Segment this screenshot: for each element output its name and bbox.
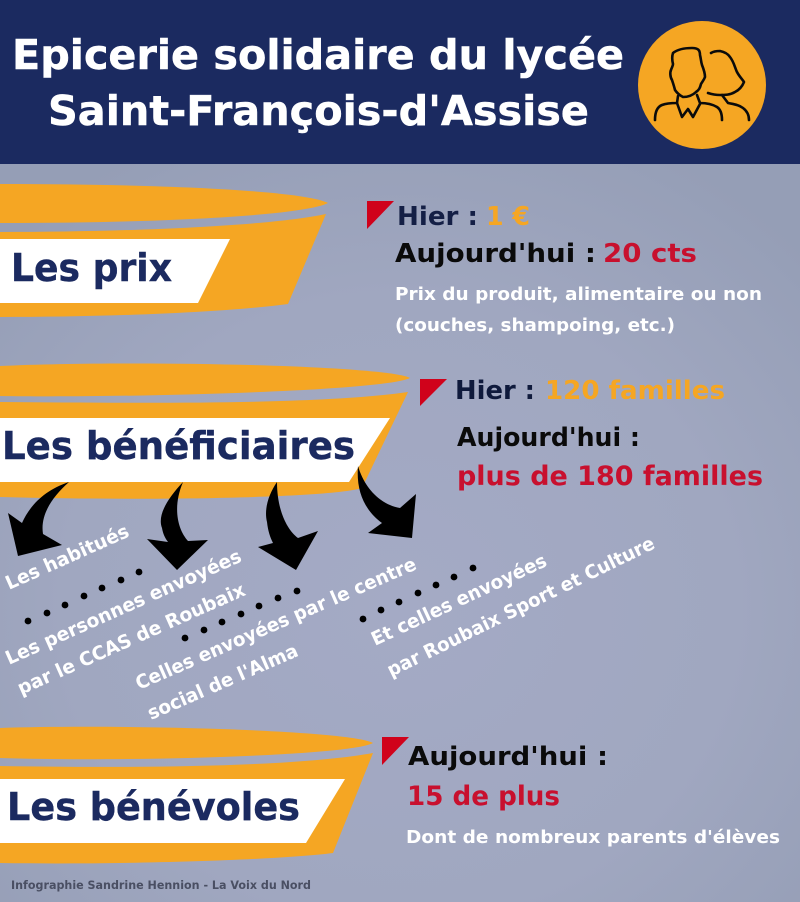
arrow 1 <box>8 482 69 556</box>
heading: les prix <box>0 239 230 303</box>
panel: les prix <box>0 184 762 336</box>
credit: Infographie Sandrine Hennion - La Voix du Nord <box>11 878 311 892</box>
band: prix <box>0 184 328 317</box>
heading: les bénévoles: Les bénévoles <box>7 785 300 829</box>
text: description bénévoles: Dont de nombreux parents d'élèves <box>406 827 780 848</box>
label: les habitués: Les habitués <box>2 520 133 595</box>
text: hier prix: Hier : <box>397 202 478 232</box>
panel: les bénévoles <box>0 727 780 863</box>
text: aujourd'hui bénéficiaires: Aujourd'hui : <box>457 423 640 453</box>
icon: red corner marker <box>367 201 394 229</box>
text: description prix <box>395 284 762 336</box>
icon: red corner marker <box>382 737 409 765</box>
label: personnes envoyées par le CCAS: par le CCAS de Roubaix <box>14 579 249 700</box>
text: plus de 180 familles: plus de 180 familles <box>457 461 763 492</box>
text: aujourd'hui prix <box>395 239 697 269</box>
heading: les bénéficiaires: Les bénéficiaires <box>2 424 355 468</box>
text: hier prix: 1 € <box>486 202 530 232</box>
heading: les prix: Les prix <box>11 246 172 290</box>
heading: les bénéficiaires <box>0 418 390 482</box>
label: Roubaix Sport et Culture: Et celles envoyées <box>368 550 550 651</box>
text: aujourd'hui prix: Aujourd'hui : <box>395 239 596 269</box>
dotted line 1 <box>25 569 142 624</box>
text: hier bénéficiaires <box>455 376 725 406</box>
heading: les bénévoles <box>0 779 345 843</box>
text: hier bénéficiaires: 120 familles <box>545 376 725 406</box>
dotted line 3 <box>360 565 476 622</box>
icon: red corner marker <box>420 379 447 406</box>
label: Roubaix Sport et Culture: par Roubaix Sport et Culture <box>384 532 658 681</box>
title <box>12 31 624 135</box>
header banner <box>0 0 800 164</box>
label: centre social de l'Alma: Celles envoyées par le centre <box>132 553 420 695</box>
band: bénévoles <box>0 727 373 863</box>
band: bénéficiaires <box>0 363 410 499</box>
text: hier bénéficiaires: Hier : <box>455 376 535 406</box>
arrow 3 <box>258 482 318 570</box>
arrow 4 <box>358 466 416 538</box>
label: personnes envoyées par le CCAS: Les personnes envoyées <box>2 545 245 670</box>
label: centre social de l'Alma: social de l'Alma <box>144 640 302 725</box>
text: hier prix <box>397 202 530 232</box>
text: aujourd'hui prix: 20 cts <box>603 239 697 269</box>
panel: les bénéficiaires <box>0 363 763 725</box>
text: description prix: (couches, shampoing, etc.) <box>395 315 675 336</box>
arrow 2 <box>147 482 208 570</box>
text: description prix: Prix du produit, alimentaire ou non <box>395 284 762 305</box>
dotted line 2 <box>182 588 300 641</box>
text: aujourd'hui bénévoles: Aujourd'hui : <box>408 742 608 772</box>
title: Saint-François-d'Assise <box>48 87 589 135</box>
text: 15 de plus: 15 de plus <box>407 781 560 812</box>
icon: two people in orange circle <box>638 21 766 149</box>
title: Epicerie solidaire du lycée <box>12 31 624 79</box>
